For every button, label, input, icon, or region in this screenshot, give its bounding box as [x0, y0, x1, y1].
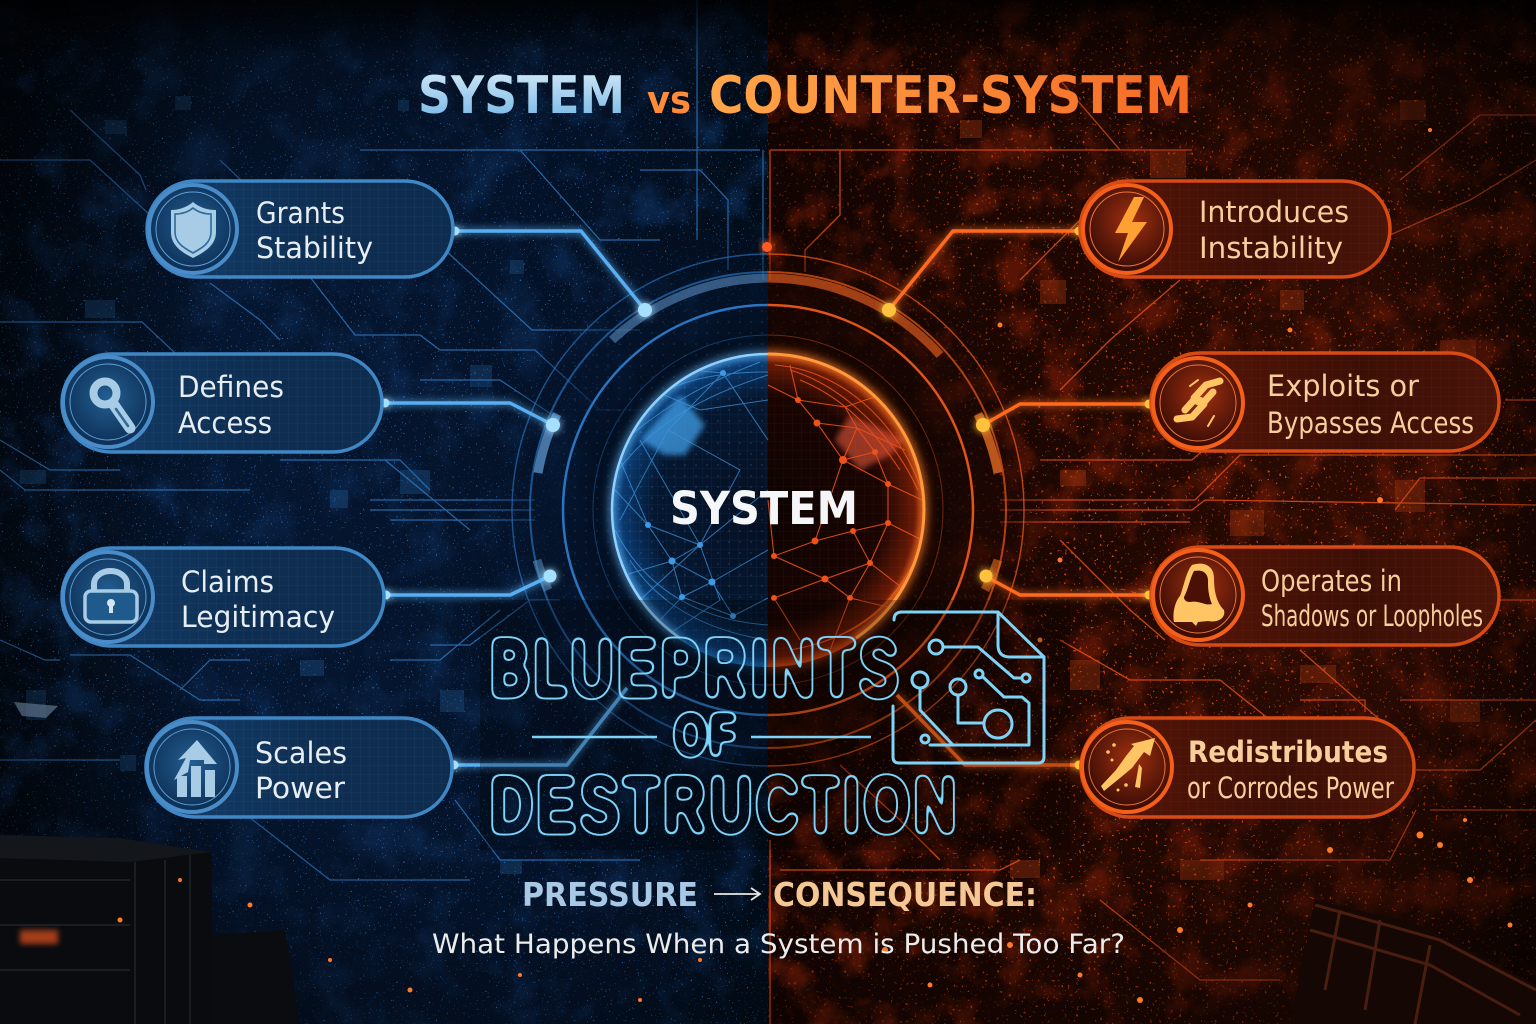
icon: hooded figure — [1173, 564, 1224, 626]
panel: exploits or bypasses access — [1151, 353, 1499, 451]
panel: redistributes or corrodes power: or Corrodes Power — [1187, 771, 1394, 805]
logo: blueprints of destruction: DESTRUCTION — [491, 763, 961, 848]
central rings — [478, 220, 1058, 800]
title: SYSTEM — [418, 66, 625, 126]
icon: lightning bolt — [1115, 197, 1147, 262]
icon: circuit document — [893, 612, 1044, 763]
panel: introduces instability — [1080, 181, 1390, 277]
logo: blueprints of destruction — [491, 612, 1044, 848]
central orb — [608, 350, 928, 670]
panel: grants stability: Grants — [256, 196, 345, 230]
icon: key — [94, 382, 130, 428]
icon: rising bars — [174, 740, 217, 797]
panel: scales power: Scales — [255, 736, 347, 770]
background: data blocks — [14, 96, 1480, 880]
background: circuit traces red — [770, 80, 1536, 1024]
title — [418, 66, 1192, 126]
connector nodes — [380, 226, 1154, 770]
panel: defines access — [62, 354, 382, 452]
icon: broken link — [1177, 380, 1220, 426]
backing panel behind logo — [480, 600, 1070, 850]
logo: blueprints of destruction: BLUEPRINTS — [491, 623, 903, 712]
panel: scales power: Power — [255, 771, 345, 805]
background: red counter-system half — [768, 0, 1536, 1024]
panel: claims legitimacy — [62, 548, 384, 646]
panel: claims legitimacy: Claims — [181, 565, 274, 599]
title: COUNTER-SYSTEM — [709, 66, 1192, 126]
panel: grants stability: Stability — [256, 231, 373, 265]
icon: shield — [171, 202, 216, 258]
panel: scales power — [146, 718, 452, 817]
logo: blueprints of destruction: OF — [675, 703, 739, 766]
panel: operates in shadows or loopholes — [1151, 547, 1499, 645]
icon: shattered arrow — [1101, 738, 1155, 792]
panel: redistributes or corrodes power — [1081, 718, 1414, 817]
panel: claims legitimacy: Legitimacy — [181, 600, 335, 634]
panel: defines access: Defines — [178, 370, 284, 404]
background: circuit traces blue — [0, 0, 763, 880]
panel: introduces instability: Introduces — [1199, 195, 1349, 229]
icon: lock — [85, 571, 137, 622]
background: isometric server blocks — [0, 835, 1536, 1024]
question: What Happens When a System is Pushed Too Far? — [432, 929, 1125, 960]
background: blue system half — [0, 0, 768, 1024]
arrow — [714, 888, 760, 900]
panel: grants stability — [147, 181, 453, 277]
orb label: SYSTEM — [670, 482, 858, 535]
panel: redistributes or corrodes power: Redistributes — [1188, 735, 1388, 769]
subtitle: consequence: CONSEQUENCE: — [773, 875, 1037, 914]
panel: operates in shadows or loopholes: Operates in — [1261, 564, 1402, 598]
connectors — [385, 231, 1150, 765]
title: vs — [647, 78, 691, 122]
panel: exploits or bypasses access: Bypasses Access — [1267, 406, 1474, 440]
embers — [118, 128, 1512, 1003]
subtitle: pressure to consequence: PRESSURE — [522, 875, 698, 914]
panel: exploits or bypasses access: Exploits or — [1267, 369, 1419, 403]
panel: defines access: Access — [178, 406, 272, 440]
panel: introduces instability: Instability — [1199, 231, 1343, 265]
